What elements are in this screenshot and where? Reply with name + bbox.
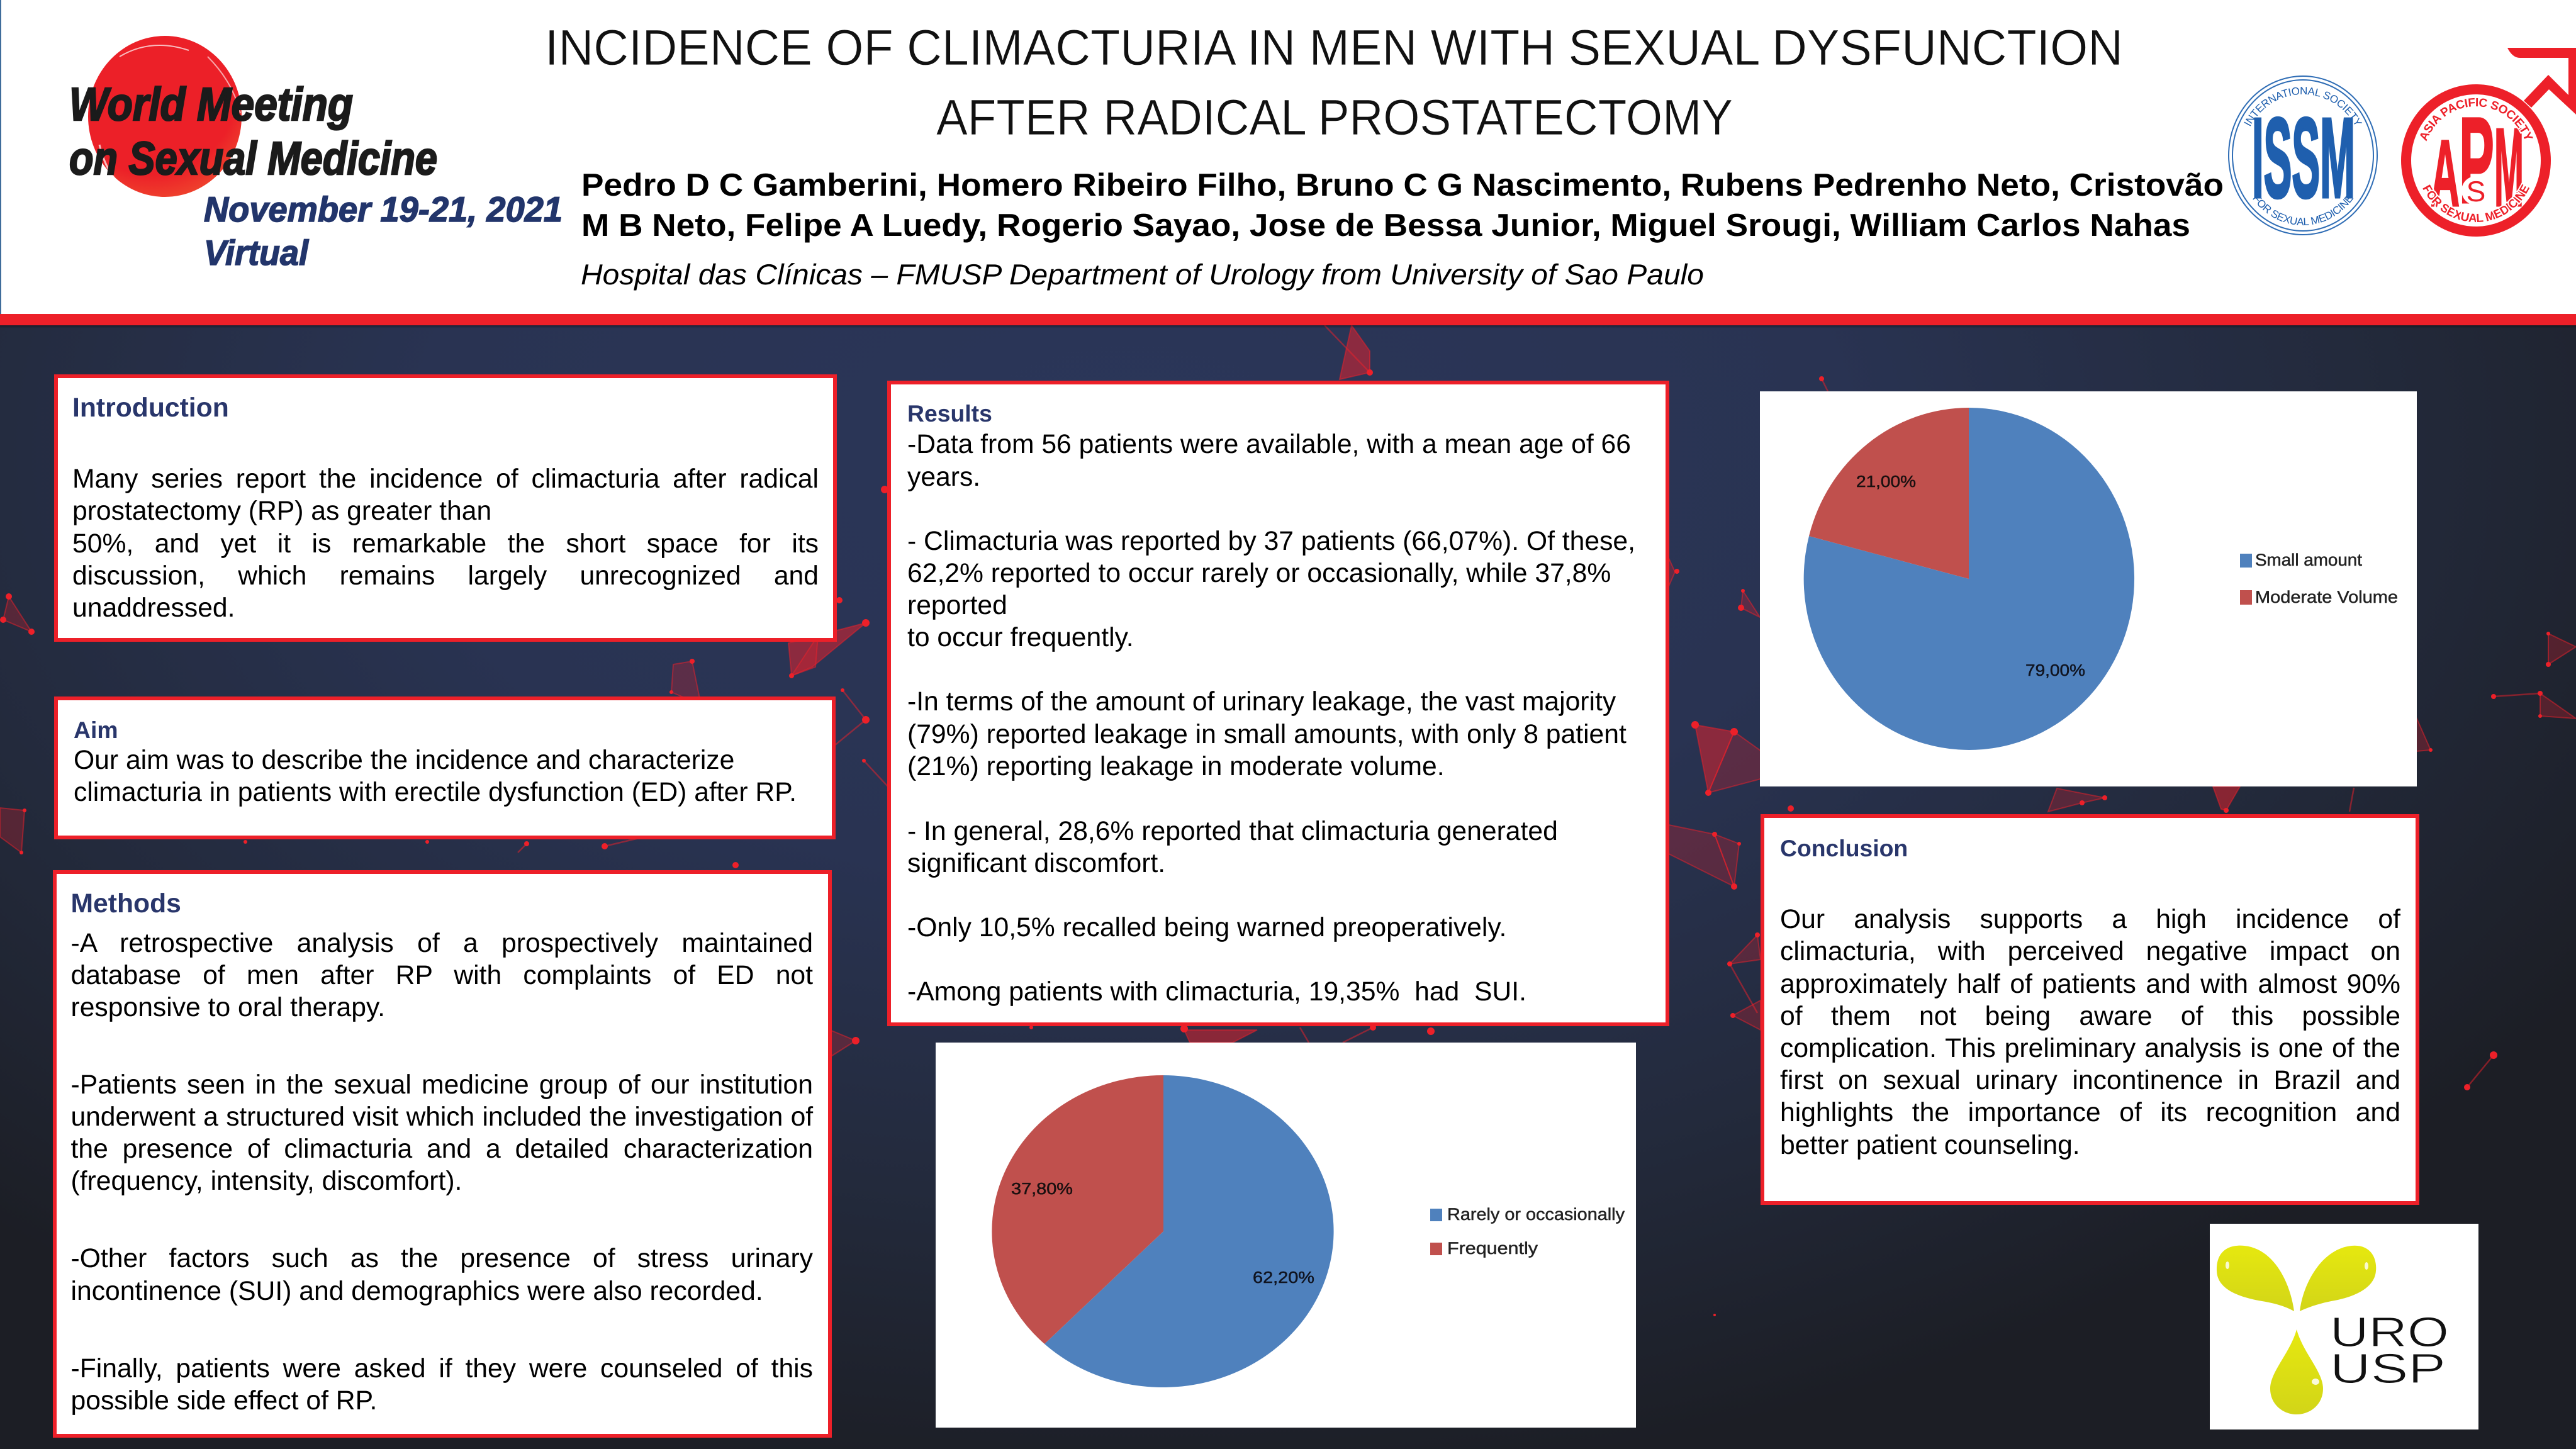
text: URO USP wordmark: URO (2330, 1309, 2449, 1356)
logo: ISSM: INTERNATIONAL SOCIETY (2244, 87, 2362, 126)
text block: introduction body (72, 464, 819, 623)
panel: Methods (53, 870, 832, 1438)
text block: methods body (70, 928, 813, 1416)
text block: introduction body: 50%, and yet it is remarkable the short space for its (72, 529, 819, 559)
text block: results body: (79%) reported leakage in small amounts, with only 8 patient (907, 719, 1627, 749)
data label: 21,00%: 21,00% (1856, 472, 1916, 491)
heading: Aim: Aim (74, 717, 118, 743)
logo: Asia Pacific Society for Sexual Medicine (2401, 48, 2576, 237)
text block: conclusion body: Our analysis supports a high incidence of (1780, 904, 2400, 934)
logo: Asia Pacific Society for Sexual Medicine: ASIA PACIFIC SOCIETY (2420, 98, 2533, 141)
conference date and format: Virtual (204, 233, 309, 272)
authors: M B Neto, Felipe A Luedy, Rogerio Sayao, Jose de Bessa Junior, Miguel Srougi, William Carlos Nahas (581, 207, 2190, 243)
text: URO USP wordmark: USP (2330, 1345, 2446, 1392)
authors (581, 167, 2224, 243)
text block: results body: to occur frequently. (907, 622, 1134, 652)
text block: introduction body: prostatectomy (RP) as greater than (72, 496, 491, 526)
text block: results body: reported (907, 590, 1007, 620)
pie slice: rarely or occasionally 62,20% (1044, 1075, 1334, 1387)
text block: results body: (21%) reporting leakage in moderate volume. (907, 751, 1445, 781)
text block: methods body: -A retrospective analysis of a prospectively maintained (70, 928, 813, 958)
conference name: on Sexual Medicine (69, 132, 437, 184)
text block: methods body: incontinence (SUI) and demographics were also recorded. (70, 1276, 763, 1306)
text block: conclusion body (1780, 904, 2401, 1160)
text block: introduction body: unaddressed. (72, 593, 235, 623)
data label: 62,20%: 62,20% (1253, 1268, 1314, 1287)
text block: conclusion body: of them not being aware of this possible (1780, 1001, 2400, 1031)
data label: 79,00%: 79,00% (2025, 661, 2085, 680)
logo: Asia Pacific Society for Sexual Medicine: S (2467, 175, 2485, 208)
text block: methods body: (frequency, intensity, discomfort). (70, 1166, 462, 1196)
logo: ISSM: FOR SEXUAL MEDICINE (2253, 196, 2353, 225)
text block: aim body: climacturia in patients with erectile dysfunction (ED) after RP. (74, 777, 797, 807)
text block: aim body (74, 745, 797, 807)
text block: results body: -In terms of the amount of urinary leakage, the vast majority (907, 686, 1616, 717)
pie slice: small amount 79,00% (1804, 408, 2134, 750)
conference name (69, 78, 437, 184)
conference name: World Meeting (69, 78, 353, 130)
text block: results body: - Climacturia was reported by 37 patients (66,07%). Of these, (907, 526, 1635, 556)
text: URO USP wordmark (2330, 1309, 2449, 1392)
logo: URO USP (2210, 1224, 2478, 1429)
legend: Rarely or occasionally (1447, 1205, 1625, 1224)
affiliation: Hospital das Clínicas – FMUSP Department of Urology from University of Sao Paulo (581, 258, 1704, 291)
text block: methods body: -Finally, patients were asked if they were counseled of this (70, 1353, 813, 1384)
text block: results body: years. (907, 462, 980, 492)
conference date and format: November 19-21, 2021 (204, 189, 563, 229)
logo: Asia Pacific Society for Sexual Medicine: FOR SEXUAL MEDICINE (2422, 182, 2529, 223)
text block: conclusion body: climacturia, with perceived negative impact on (1780, 936, 2400, 966)
heading: Introduction: Introduction (72, 393, 229, 423)
legend (1430, 1205, 1625, 1258)
legend: Moderate Volume (2255, 588, 2398, 607)
text block: results body: - In general, 28,6% reported that climacturia generated (907, 816, 1558, 846)
heading: Conclusion: Conclusion (1780, 835, 1908, 861)
text block: results body: significant discomfort. (907, 848, 1165, 878)
chart: frequency pie (936, 1043, 1636, 1428)
text block: results body: -Only 10,5% recalled being warned preoperatively. (907, 912, 1506, 943)
text block: methods body: responsive to oral therapy. (70, 992, 385, 1022)
panel: Introduction (54, 374, 837, 642)
text block: conclusion body: complication. This preliminary analysis is one of the (1780, 1033, 2400, 1063)
text block: conclusion body: better patient counseling. (1780, 1130, 2080, 1160)
conference logo: World Meeting on Sexual Medicine (69, 36, 563, 272)
data label: 37,80%: 37,80% (1011, 1179, 1073, 1198)
chart: urinary leakage volume pie (1760, 391, 2417, 786)
text block: results body: -Among patients with climacturia, 19,35% had SUI. (907, 976, 1526, 1007)
text block: aim body: Our aim was to describe the incidence and characterize (74, 745, 734, 775)
text block: introduction body: discussion, which remains largely unrecognized and (72, 561, 819, 591)
text block: methods body: -Patients seen in the sexual medicine group of our institution (70, 1070, 813, 1100)
header band: ISSM (2252, 95, 2355, 221)
heading: Methods: Methods (70, 888, 181, 919)
header band (0, 0, 2576, 328)
panel: Aim (54, 697, 836, 839)
legend: Frequently (1447, 1239, 1538, 1258)
heading: Results: Results (907, 400, 992, 427)
logo: ISSM (2228, 76, 2378, 235)
panel: Conclusion (1761, 814, 2419, 1205)
text block: methods body: the presence of climacturia and a detailed characterization (70, 1134, 813, 1164)
conference date and format (204, 189, 563, 272)
pie slice: moderate volume 21,00% (1809, 408, 1969, 579)
title: AFTER RADICAL PROSTATECTOMY (936, 89, 1733, 145)
text block: results body: -Data from 56 patients were available, with a mean age of 66 (907, 429, 1631, 459)
text block: methods body: -Other factors such as the presence of stress urinary (70, 1243, 813, 1273)
text block: conclusion body: first on sexual urinary incontinence in Brazil and (1780, 1065, 2400, 1095)
title (545, 20, 2123, 145)
text block: conclusion body: highlights the importance of its recognition and (1780, 1097, 2400, 1127)
logo: Asia Pacific Society for Sexual Medicine: P (2459, 92, 2494, 229)
text block: introduction body: Many series report the incidence of climacturia after radical (72, 464, 819, 494)
icon: male symbol arrow (2507, 48, 2576, 115)
logo: Asia Pacific Society for Sexual Medicine: A (2431, 120, 2460, 226)
legend: Small amount (2255, 551, 2363, 569)
panel: Results (887, 381, 1669, 1026)
pie slice: frequently 37,80% (992, 1075, 1163, 1344)
text block: methods body: possible side effect of RP. (70, 1385, 377, 1416)
authors: Pedro D C Gamberini, Homero Ribeiro Filho, Bruno C G Nascimento, Rubens Pedrenho Neto, Cristovão (581, 167, 2224, 203)
icon: red brush circle (88, 36, 242, 197)
icon: three yellow drops (2217, 1246, 2376, 1414)
text block: methods body: underwent a structured visit which included the investigation of (70, 1102, 813, 1132)
title: INCIDENCE OF CLIMACTURIA IN MEN WITH SEXUAL DYSFUNCTION (545, 20, 2123, 76)
text block: results body: 62,2% reported to occur rarely or occasionally, while 37,8% (907, 558, 1611, 588)
text block: conclusion body: approximately half of patients and with almost 90% (1780, 969, 2400, 999)
legend (2240, 551, 2398, 607)
text block: results body (907, 429, 1635, 1007)
text block: methods body: database of men after RP with complaints of ED not (70, 960, 813, 990)
